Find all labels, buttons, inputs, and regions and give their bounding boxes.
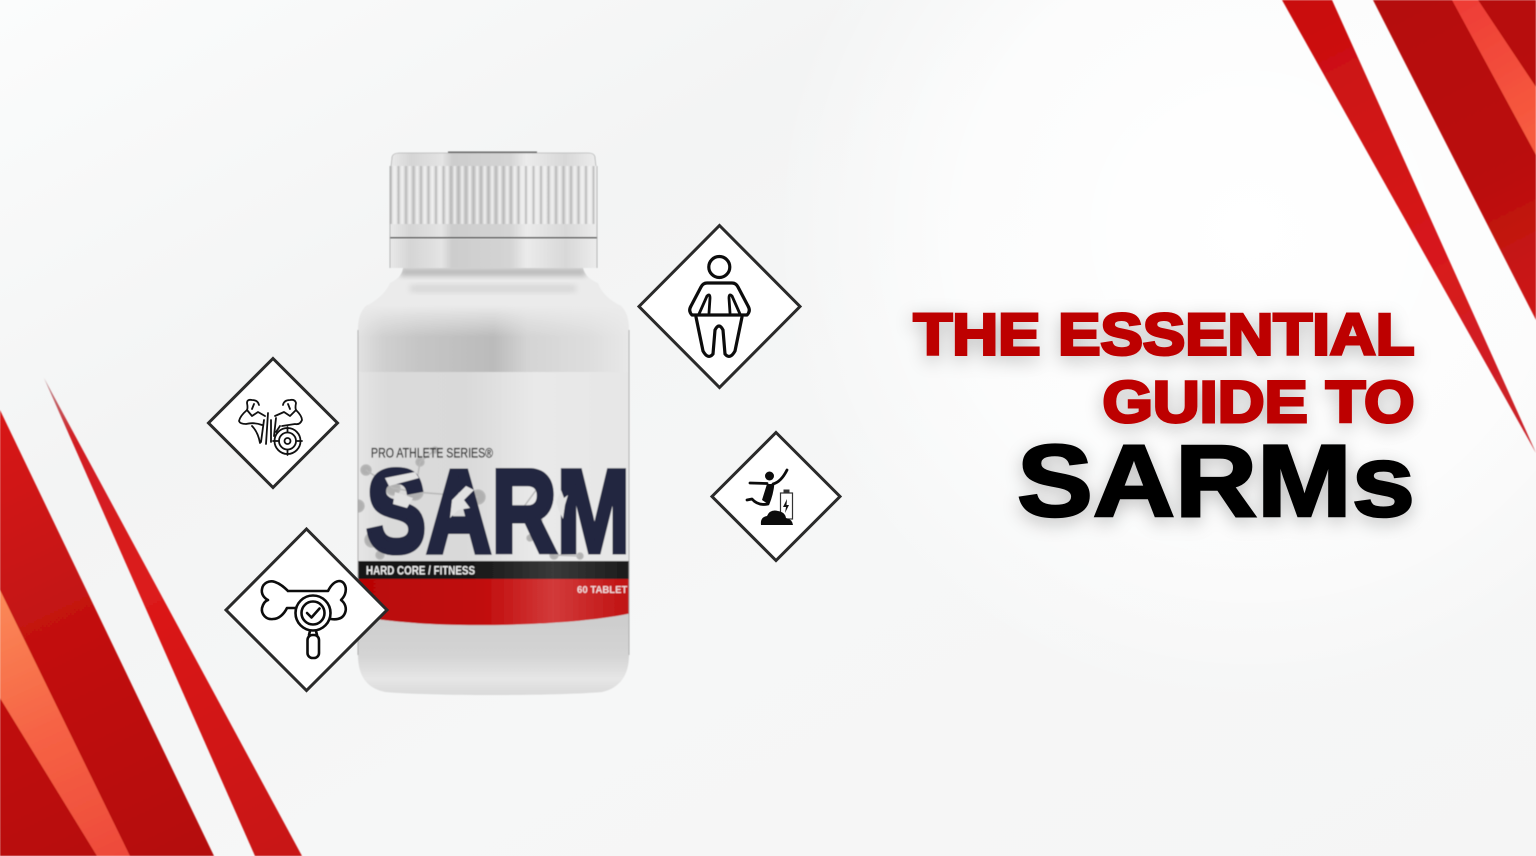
title — [914, 302, 1415, 538]
bottle body — [350, 266, 640, 697]
black band — [350, 561, 640, 579]
red band — [350, 579, 640, 625]
title line 3: SARMs — [1017, 424, 1415, 538]
label: tablet count: 60 TABLET C — [577, 584, 637, 596]
bottle cap — [390, 152, 597, 268]
label: hard core: HARD CORE / FITNESS — [366, 564, 475, 578]
SARM wordmark — [366, 466, 627, 556]
icon: weight loss diamond — [639, 226, 800, 388]
icon: muscle target diamond — [208, 358, 338, 488]
product bottle — [350, 152, 640, 697]
icon: energy diamond — [712, 432, 840, 560]
icon: bone check diamond — [226, 529, 387, 690]
SARM wordmark: SARM — [366, 446, 632, 578]
bottle outline — [358, 330, 629, 655]
label: series: PRO ATHLETE SERIES® — [371, 446, 493, 460]
decorative stripes: top right — [1282, 0, 1536, 453]
title line 1: THE ESSENTIAL — [914, 302, 1414, 368]
decorative stripes: bottom left — [0, 378, 302, 856]
title line 2: GUIDE TO — [1102, 370, 1414, 435]
molecule pattern — [352, 447, 583, 559]
